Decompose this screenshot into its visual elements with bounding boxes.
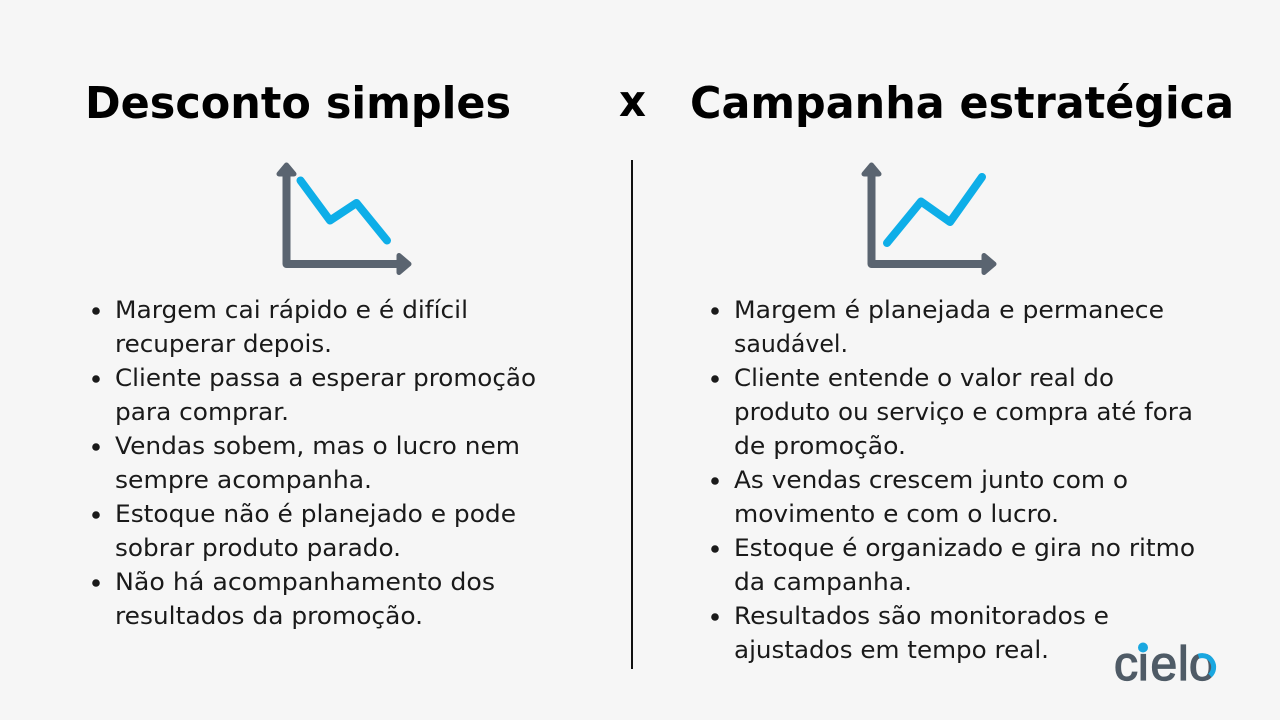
list: Campanha estratégica benefits: saudável. (734, 330, 848, 358)
list: Desconto simples drawbacks: Vendas sobem, mas o lucro nem (115, 432, 520, 460)
list: Desconto simples drawbacks: para comprar. (115, 398, 289, 426)
list: Campanha estratégica benefits: Cliente entende o valor real do (734, 364, 1114, 392)
list: Campanha estratégica benefits: movimento e com o lucro. (734, 500, 1059, 528)
list: Campanha estratégica benefits: Margem é planejada e permanece (734, 296, 1164, 324)
list: Campanha estratégica benefits: ajustados em tempo real. (734, 636, 1049, 664)
list: Campanha estratégica benefits: Estoque é organizado e gira no ritmo (734, 534, 1195, 562)
list: Desconto simples drawbacks (92, 296, 536, 630)
list: Desconto simples drawbacks: resultados da promoção. (115, 602, 423, 630)
list: Desconto simples drawbacks: Margem cai rápido e é difícil (115, 296, 468, 324)
list: Desconto simples drawbacks: sempre acompanha. (115, 466, 372, 494)
list: Campanha estratégica benefits: da campanha. (734, 568, 912, 596)
list: Campanha estratégica benefits: produto ou serviço e compra até fora (734, 398, 1193, 426)
center divider (631, 160, 633, 669)
list: Desconto simples drawbacks: Cliente passa a esperar promoção (115, 364, 536, 392)
heading: Campanha estratégica: Campanha estratégica (690, 78, 1234, 129)
list: Campanha estratégica benefits: Resultados são monitorados e (734, 602, 1109, 630)
list: Campanha estratégica benefits: As vendas crescem junto com o (734, 466, 1128, 494)
list: Desconto simples drawbacks: sobrar produto parado. (115, 534, 401, 562)
heading: versus x: x (619, 76, 646, 127)
icon: rising line chart (864, 165, 994, 272)
icon: declining line chart (279, 165, 409, 272)
logo: cielo: cielo (1114, 638, 1216, 691)
list: Campanha estratégica benefits (711, 296, 1195, 664)
list: Desconto simples drawbacks: Não há acompanhamento dos (115, 568, 495, 596)
list: Desconto simples drawbacks: recuperar depois. (115, 330, 332, 358)
heading: Desconto simples: Desconto simples (85, 78, 511, 129)
list: Desconto simples drawbacks: Estoque não é planejado e pode (115, 500, 516, 528)
list: Campanha estratégica benefits: de promoção. (734, 432, 906, 460)
